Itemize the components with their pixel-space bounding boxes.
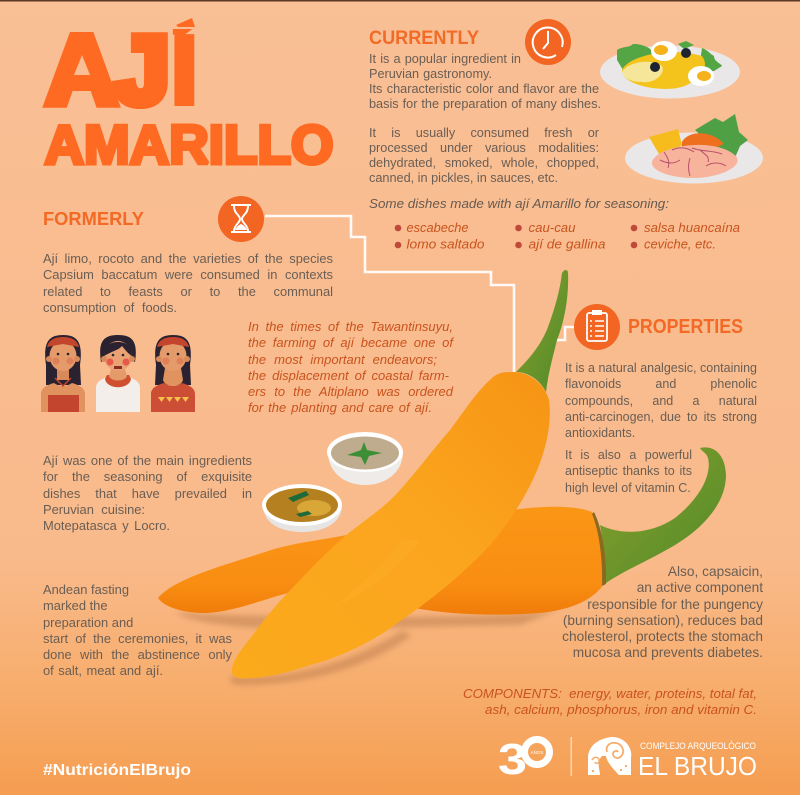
text: seasoning: Ají was one of the main ingredients [43,453,252,468]
icon: clock [525,19,571,65]
heading: properties: PROPERTIES [628,315,743,338]
text: seasoning: dishes that have prevailed in [43,486,252,501]
panel: properties [463,304,765,717]
text: properties paragraph 1: It is a natural analgesic, containing [565,361,757,375]
text: Tawantinsuyu callout: ers to the Altiplano was ordered [248,384,453,399]
text: properties paragraph 1: compounds, and a natural [565,394,757,408]
text: capsaicin: cholesterol, protects the stomach [562,629,763,644]
text: Tawantinsuyu callout: In the times of the Tawantinsuyu, [248,319,453,334]
hashtag: #NutriciónElBrujo [43,762,191,779]
icon: three Andean figures [41,335,195,412]
title: AMARILLO [44,114,334,176]
text: currently paragraph 2: It is usually consumed fresh or [369,126,599,140]
text: seasoning [43,453,259,537]
text: Tawantinsuyu callout: the most important endeavors; [248,352,437,367]
list: dishes: ceviche, etc. [644,238,716,252]
text: seasoning: Motepatasca y Locro. [43,518,170,533]
text: capsaicin: responsible for the pungency [587,597,763,612]
text: capsaicin [540,564,763,664]
text: capsaicin: mucosa and prevents diabetes. [573,645,763,660]
text: Andean fasting [43,582,239,682]
text: Andean fasting: of salt, meat and ají. [43,663,163,678]
text: currently paragraph 1: Its characteristic color and flavor are the [369,82,599,96]
list: dishes: escabeche [406,221,469,235]
icon: soup bowl with herbs [327,432,403,485]
chili peppers [158,270,726,685]
text: components: COMPONENTS: energy, water, proteins, total fat, [463,687,757,701]
text: formerly intro [43,251,338,319]
text: formerly intro: consumption of foods. [43,300,177,315]
logo emblem [588,737,631,775]
text: components: ash, calcium, phosphorus, iron and vitamin C. [485,703,757,717]
logo: El Brujo: COMPLEJO ARQUEOLÓGICO [640,741,756,751]
logo: 30 años: AÑOS [531,749,543,755]
list: dishes: cau-cau [528,221,576,235]
text: capsaicin: (burning sensation), reduces bad [563,613,763,628]
text: formerly intro: related to feasts or to the communal [43,284,333,299]
panel: currently [369,19,763,252]
text: properties paragraph 1: flavonoids and phenolic [565,377,757,391]
title: Í [171,17,200,124]
connector lines [265,216,575,372]
text: Tawantinsuyu callout: for the planting and care of ají. [248,400,432,415]
text: capsaicin: Also, capsaicin, [668,564,763,579]
text: currently paragraph 2: canned, in pickles, in sauces, etc. [369,171,558,185]
shadows [175,609,560,685]
logo: 30 años: 3 [498,735,527,784]
text: components [463,687,757,717]
text: Andean fasting: Andean fasting [43,582,129,597]
text: Andean fasting: preparation and [43,615,133,630]
title: A [47,17,116,124]
text: currently paragraph 1: Peruvian gastronomy. [369,67,492,81]
text: Tawantinsuyu callout: the displacement of coastal farm- [248,368,449,383]
list: dishes [395,221,740,252]
text: Andean fasting: done with the abstinence only [43,647,232,662]
title: J [116,17,169,124]
text: currently paragraph 1: basis for the preparation of many dishes. [369,97,601,111]
text: seasoning: Peruvian cuisine: [43,502,145,517]
text: seasoning: for the seasoning of exquisite [43,469,252,484]
logo: El Brujo: EL BRUJO [638,751,757,781]
text: formerly intro: Capsium baccatum were consumed in contexts [43,267,333,282]
text: properties paragraph 2: It is also a powerful [565,448,692,462]
pepper: front [232,270,568,679]
text: currently paragraph 2: dehydrated, smoked, whole, chopped, [369,156,599,170]
text: dishes intro: Some dishes made with ají Amarillo for seasoning: [369,196,669,211]
logo: El Brujo [588,737,757,781]
text: properties paragraph 2 [565,447,701,499]
text: currently paragraph 1: It is a popular ingredient in [369,52,521,66]
pepper: back [158,447,726,615]
text: Tawantinsuyu callout [248,319,460,419]
figure 2 [96,335,140,412]
text: currently paragraph 2: processed under various modalities: [369,141,599,155]
figure 1 [41,335,85,412]
heading: formerly: FORMERLY [43,208,145,229]
list: dishes: lomo saltado [406,238,485,252]
panel: formerly [41,196,460,682]
icon: plate with potato dish [600,41,740,98]
title [44,17,334,176]
text: properties paragraph 2: antiseptic thanks to its [565,464,692,478]
list: dishes: ají de gallina [528,238,606,252]
text: properties paragraph 1: antioxidants. [565,426,635,440]
text: Andean fasting: start of the ceremonies, it was [43,631,232,646]
list: dishes: salsa huancaína [644,221,740,235]
text: currently paragraph 1 [369,52,609,116]
heading: currently: CURRENTLY [369,28,479,49]
text: formerly intro: Ají limo, rocoto and the varieties of the species [43,251,333,266]
text: properties paragraph 2: high level of vitamin C. [565,481,691,495]
logo: 30 años [498,735,550,784]
icon: clipboard [574,304,620,350]
icon: plate with ceviche [625,114,763,184]
icon: hourglass [218,196,264,242]
figure 3 [151,335,195,412]
text: properties paragraph 1: anti-carcinogen, due to its strong [565,410,757,424]
text: capsaicin: an active component [637,580,763,595]
text: properties paragraph 1 [565,360,765,444]
icon: locro bowl [262,484,342,532]
text: Tawantinsuyu callout: the farming of ají became one of [248,335,453,350]
text: Andean fasting: marked the [43,598,108,613]
text: currently paragraph 2 [369,126,609,190]
